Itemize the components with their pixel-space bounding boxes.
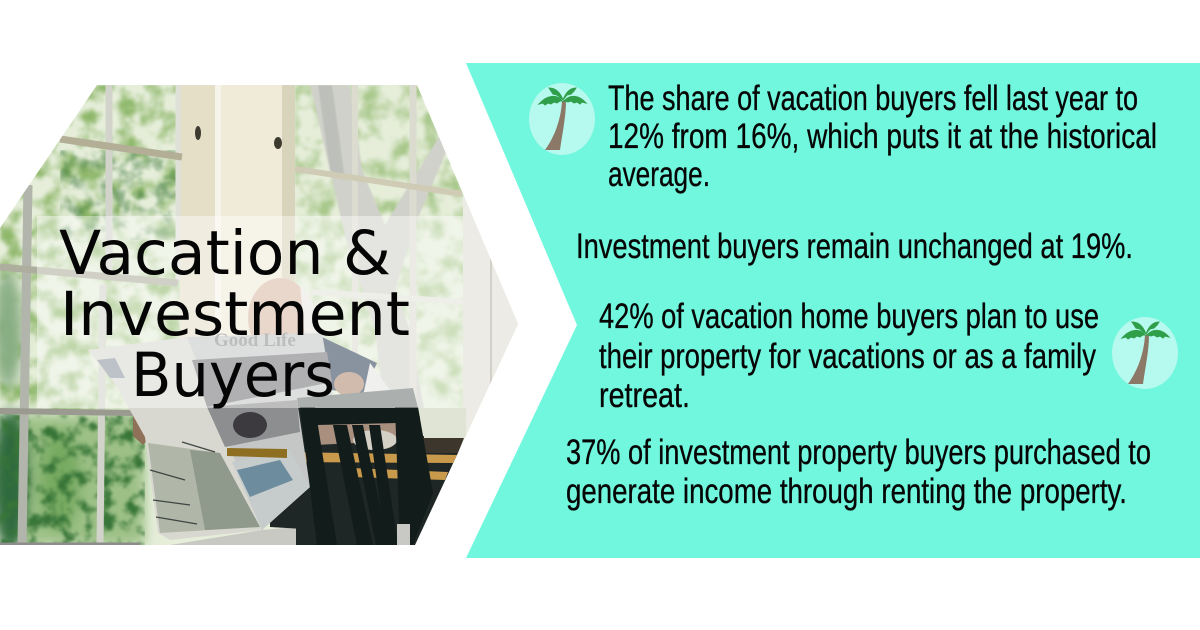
- panel: teal arrow background: [466, 63, 1200, 558]
- man: head, vest, shirt, hands: [248, 278, 304, 335]
- title: Investment: [60, 279, 410, 350]
- icon: palm tree right: [1112, 317, 1178, 389]
- photo: man reading newspaper in hexagon: [0, 85, 520, 550]
- text: investment property income: [566, 433, 1151, 511]
- translucent title band: [37, 216, 463, 408]
- text: vacation buyer share: average.: [608, 155, 710, 194]
- title: [59, 218, 410, 411]
- title: Vacation &: [59, 218, 391, 289]
- text: vacation home plans: [599, 297, 1099, 415]
- icon: palm tree top: [529, 83, 595, 155]
- window frames: [0, 85, 465, 545]
- text: vacation home plans: retreat.: [599, 376, 690, 415]
- tree trunk: [310, 85, 447, 415]
- foliage: [0, 85, 180, 415]
- table and dark interior: [296, 408, 418, 548]
- newspaper: [187, 333, 333, 530]
- pillar: [180, 85, 215, 338]
- title: Buyers: [131, 340, 335, 411]
- chair: [297, 388, 433, 545]
- text: vacation buyer share: [608, 79, 1157, 194]
- photo: man reading newspaper in hexagon: Good Life: [214, 330, 296, 351]
